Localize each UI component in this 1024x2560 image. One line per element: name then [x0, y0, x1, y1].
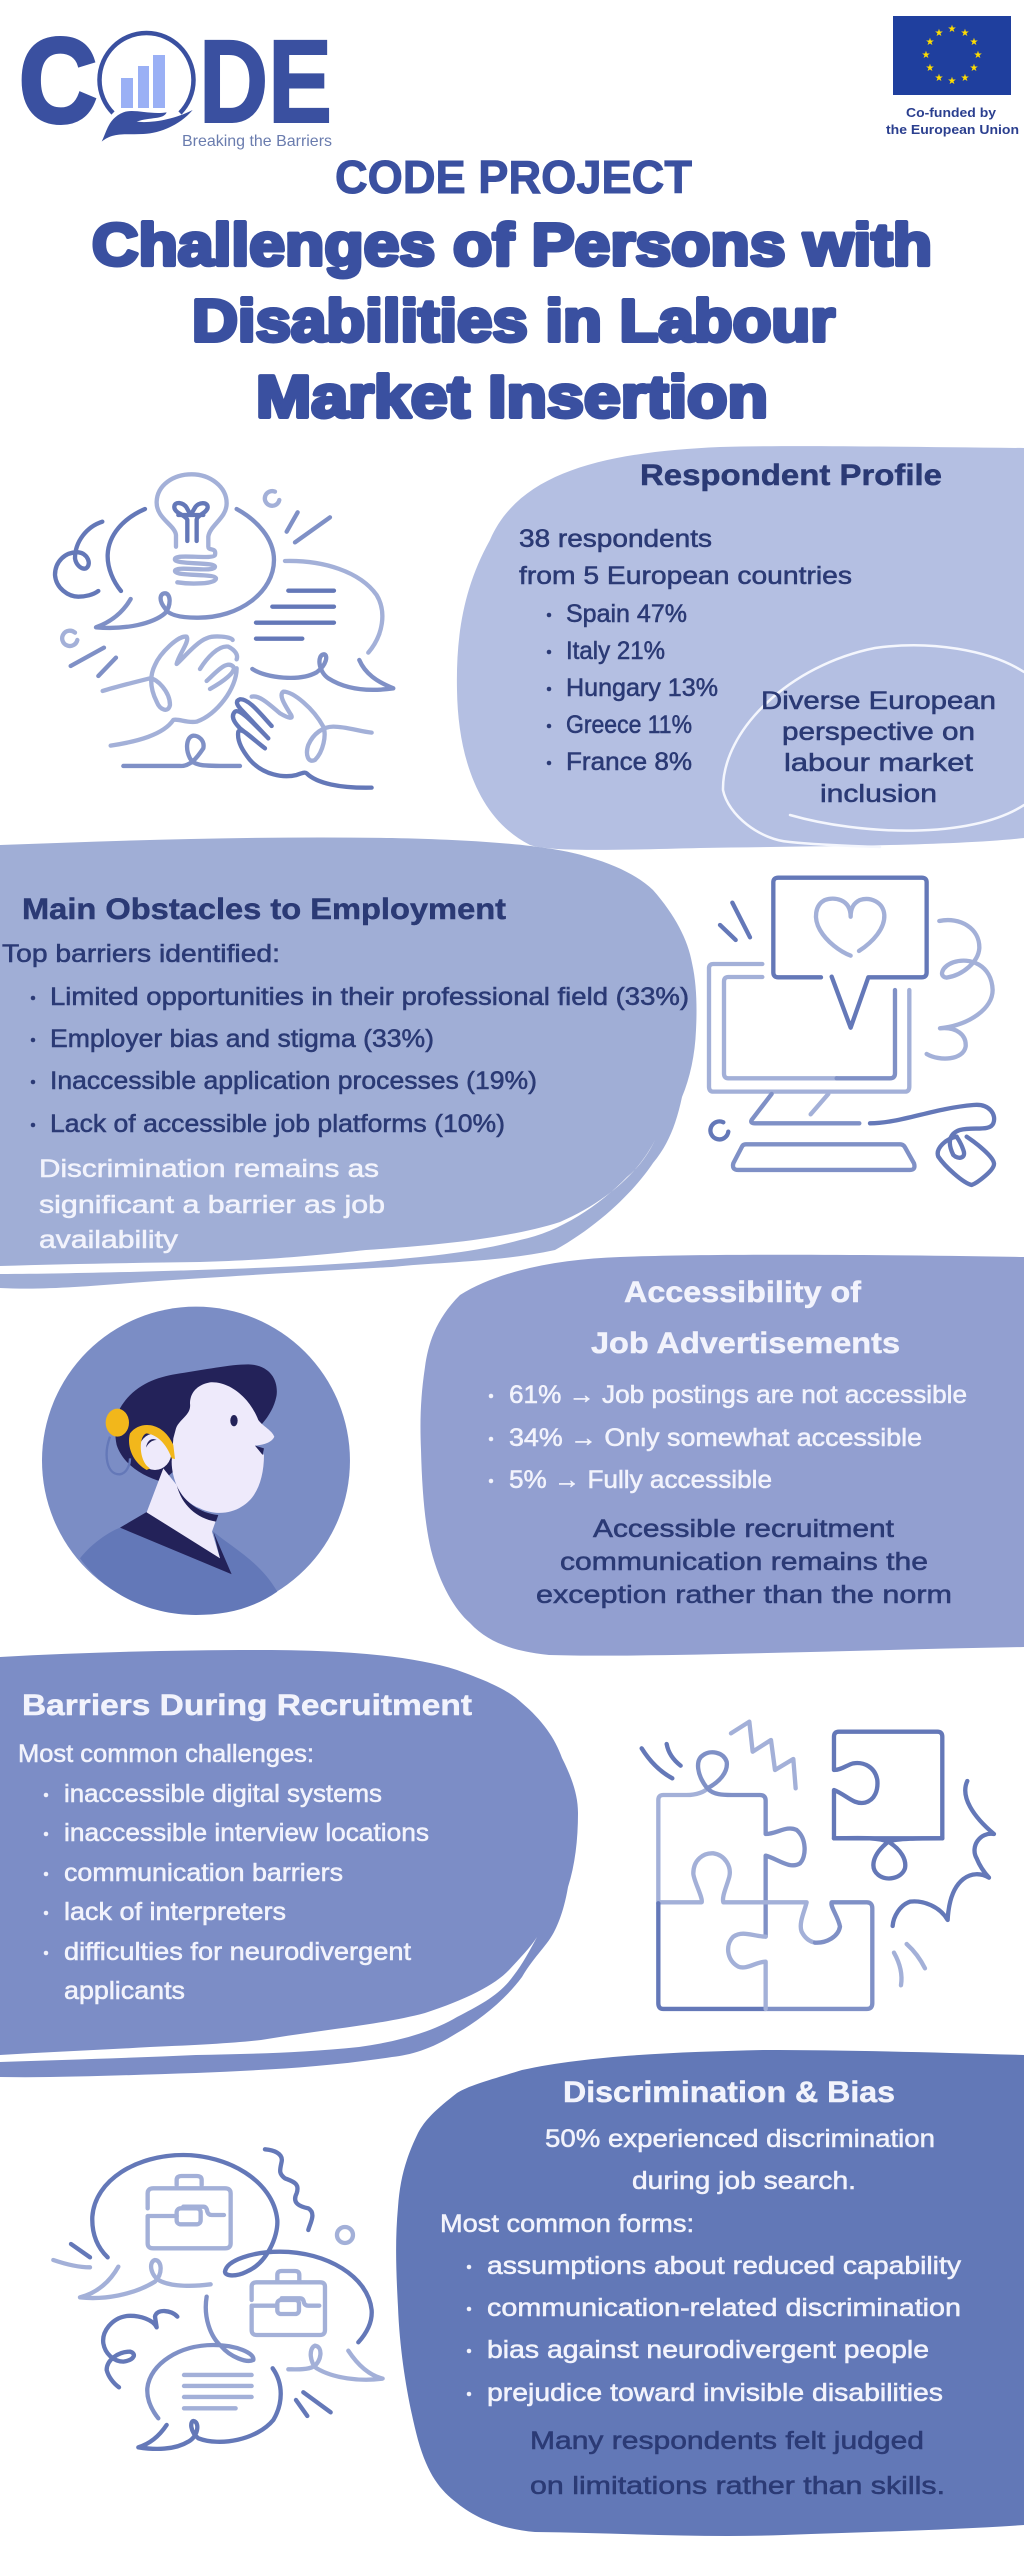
EU co-funded emblem: the European Union: [886, 122, 1019, 137]
EU co-funded emblem: ★: [922, 50, 931, 61]
EU co-funded emblem: ★: [974, 50, 983, 61]
list: forms of discrimination: prejudice toward invisible disabilities: [487, 2379, 943, 2407]
list: recruitment challenges: inaccessible interview locations: [64, 1819, 429, 1847]
text: accessibility takeaway: exception rather than the norm: [536, 1581, 952, 1609]
list: recruitment challenges: [18, 1740, 429, 2005]
EU co-funded emblem: ★: [970, 63, 979, 74]
text: discrimination statistic: [545, 2125, 935, 2195]
decorative tail gap: [0, 1937, 537, 2062]
text: discrimination takeaway: Many respondents felt judged: [530, 2427, 924, 2455]
heading: barriers during recruitment: Barriers During Recruitment: [22, 1689, 472, 1722]
callout: diverse european perspective: inclusion: [820, 780, 937, 808]
EU co-funded emblem: ★: [948, 76, 957, 87]
list: forms of discrimination: bias against neurodivergent people: [487, 2336, 929, 2364]
list: top barriers: Limited opportunities in their professional field (33%): [50, 983, 689, 1011]
logo: CODE Breaking the Barriers: Breaking the Barriers: [182, 133, 332, 150]
EU co-funded emblem: ★: [935, 28, 944, 39]
list: accessibility stats: [489, 1381, 967, 1494]
logo: CODE Breaking the Barriers: [19, 14, 332, 150]
list: top barriers: Inaccessible application processes (19%): [50, 1067, 537, 1095]
text: respondent count: [519, 525, 852, 590]
EU co-funded emblem: Co-funded by: [906, 105, 997, 120]
panel: respondent profile: [457, 446, 1024, 850]
list: top barriers: Employer bias and stigma (33%): [50, 1025, 434, 1053]
list: recruitment challenges: applicants: [64, 1977, 185, 2005]
list: recruitment challenges: lack of interpreters: [64, 1898, 286, 1926]
list: countries: Hungary 13%: [566, 674, 718, 702]
text: respondent count: 38 respondents: [519, 525, 712, 553]
list: countries: [547, 600, 718, 776]
title: Market Insertion: [256, 364, 768, 430]
logo: CODE Breaking the Barriers: C: [19, 14, 97, 148]
list: forms of discrimination: communication-related discrimination: [487, 2294, 961, 2322]
decorative tail gap: [0, 1140, 655, 1274]
text: discrimination statistic: during job search.: [632, 2167, 856, 2195]
text: discrimination takeaway: [39, 1155, 385, 1254]
heading: main obstacles: Main Obstacles to Employment: [22, 893, 506, 926]
title: Challenges of Persons with: [92, 212, 932, 278]
title: [92, 151, 932, 430]
list: accessibility stats: 5% → Fully accessible: [509, 1466, 772, 1494]
list: countries: France 8%: [566, 748, 692, 776]
list: forms of discrimination: Most common forms:: [440, 2210, 694, 2238]
list: top barriers: Lack of accessible job platforms (10%): [50, 1110, 505, 1138]
callout: diverse european perspective: [723, 645, 1024, 847]
list: top barriers: [2, 940, 689, 1138]
list: forms of discrimination: assumptions about reduced capability: [487, 2252, 962, 2280]
heading: accessibility: [591, 1276, 900, 1360]
list: forms of discrimination: [440, 2210, 962, 2407]
panel: accessibility of job advertisements: [420, 1255, 1024, 1656]
list: recruitment challenges: communication barriers: [64, 1859, 343, 1887]
text: accessibility takeaway: [536, 1515, 952, 1609]
panel: main obstacles to employment: [0, 837, 697, 1289]
EU co-funded emblem: ★: [926, 63, 935, 74]
text: discrimination takeaway: Discrimination remains as: [39, 1155, 379, 1183]
list: countries: Italy 21%: [566, 637, 665, 665]
text: discrimination takeaway: significant a barrier as job: [39, 1191, 385, 1219]
EU co-funded emblem: ★: [961, 73, 970, 84]
icon: computer with heart message: [709, 878, 994, 1185]
text: discrimination takeaway: on limitations rather than skills.: [530, 2472, 945, 2500]
list: accessibility stats: 61% → Job postings are not accessible: [509, 1381, 967, 1409]
text: accessibility takeaway: communication remains the: [560, 1548, 928, 1576]
list: recruitment challenges: inaccessible digital systems: [64, 1780, 382, 1808]
text: discrimination takeaway: [530, 2427, 945, 2500]
list: top barriers: Top barriers identified:: [2, 940, 280, 968]
EU co-funded emblem: ★: [970, 37, 979, 48]
icon: speech bubbles with briefcases: [53, 2149, 383, 2449]
icon: light bulb and hands: [55, 474, 393, 788]
illustration: person with hearing aid: [42, 1307, 350, 1615]
heading: accessibility: Job Advertisements: [591, 1327, 900, 1360]
panel: barriers during recruitment: [0, 1650, 578, 2077]
heading: accessibility: Accessibility of: [624, 1276, 862, 1309]
icon: puzzle pieces: [642, 1722, 994, 2009]
EU co-funded emblem: ★: [948, 24, 957, 35]
callout: diverse european perspective: Diverse European: [761, 687, 996, 715]
title: CODE PROJECT: [335, 151, 692, 203]
list: recruitment challenges: difficulties for neurodivergent: [64, 1938, 411, 1966]
text: respondent count: from 5 European countries: [519, 562, 852, 590]
list: accessibility stats: 34% → Only somewhat accessible: [509, 1424, 922, 1452]
EU co-funded emblem: [886, 16, 1019, 137]
callout: diverse european perspective: labour market: [784, 749, 973, 777]
list: recruitment challenges: Most common challenges:: [18, 1740, 314, 1768]
callout: diverse european perspective: perspective on: [782, 718, 975, 746]
EU co-funded emblem: ★: [935, 73, 944, 84]
text: discrimination takeaway: availability: [39, 1226, 179, 1254]
text: discrimination statistic: 50% experienced discrimination: [545, 2125, 935, 2153]
heading: respondent profile: Respondent Profile: [640, 459, 942, 492]
title: Disabilities in Labour: [192, 288, 835, 354]
list: countries: Spain 47%: [566, 600, 687, 628]
text: accessibility takeaway: Accessible recruitment: [593, 1515, 894, 1543]
panel: discrimination and bias: [396, 2050, 1024, 2536]
logo: CODE Breaking the Barriers: DE: [199, 16, 332, 148]
EU co-funded emblem: ★: [961, 28, 970, 39]
list: countries: Greece 11%: [566, 711, 692, 739]
heading: discrimination and bias: Discrimination & Bias: [563, 2076, 895, 2109]
EU co-funded emblem: ★: [926, 37, 935, 48]
